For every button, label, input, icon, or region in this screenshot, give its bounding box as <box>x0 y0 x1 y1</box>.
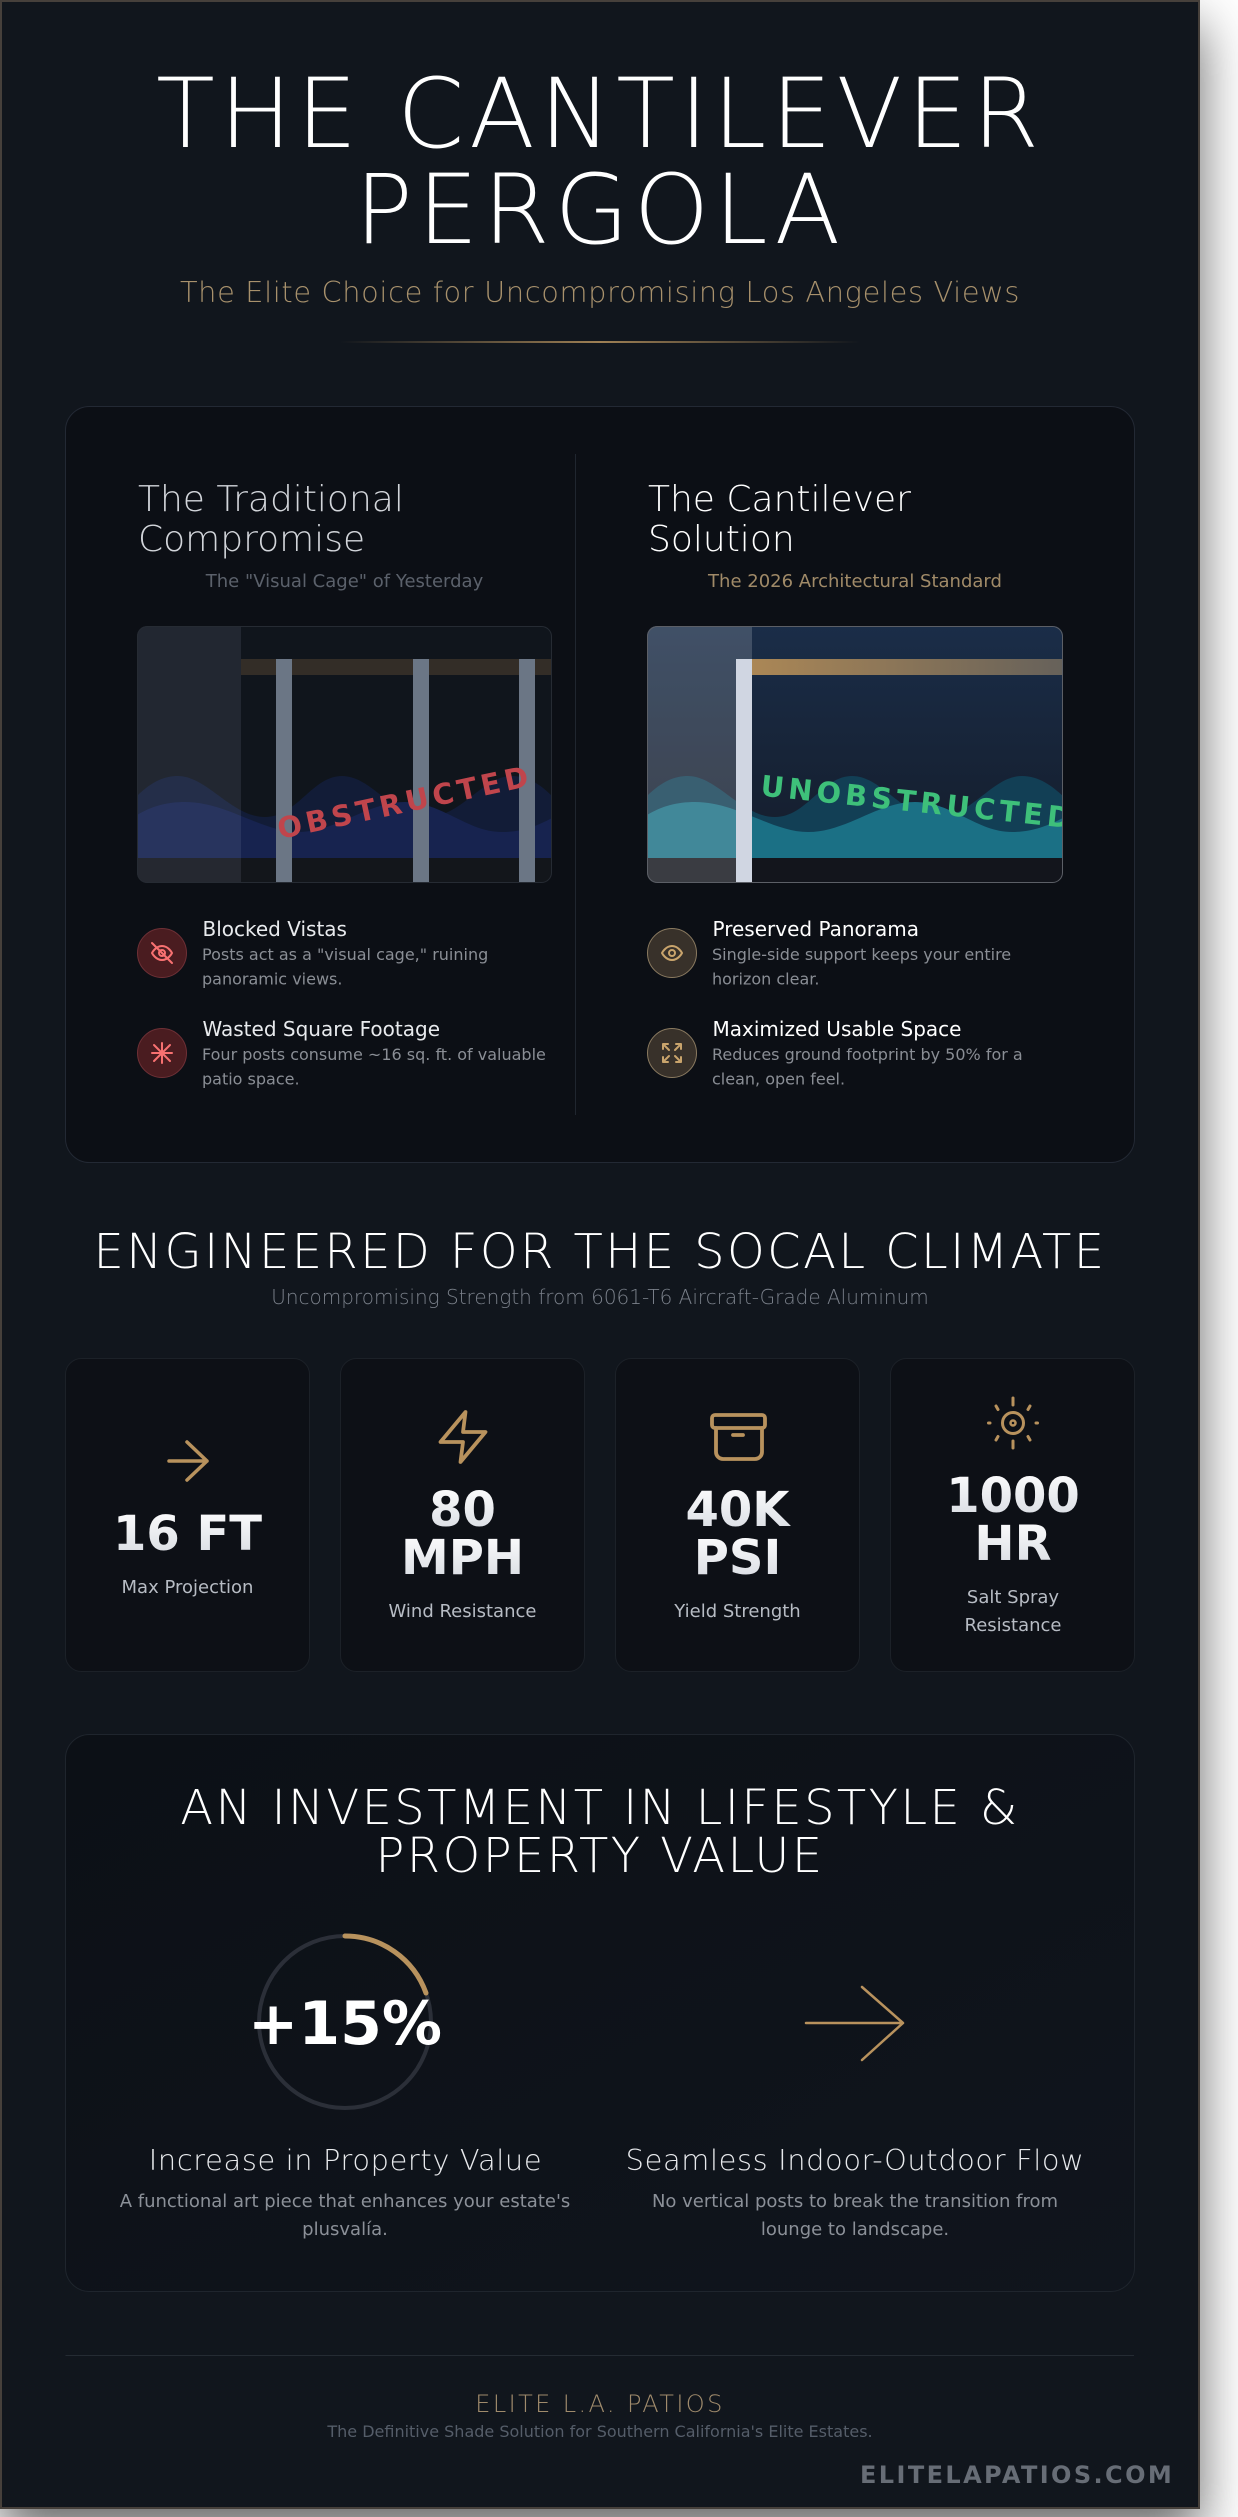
icon: lightning <box>440 1412 486 1462</box>
text: seamless flow: No vertical posts to break the transition from <box>652 2191 1058 2212</box>
title <box>156 58 1044 266</box>
text: seamless flow: Seamless Indoor-Outdoor Flow <box>626 2143 1084 2177</box>
footer tagline: The Definitive Shade Solution for Southern California's Elite Estates. <box>326 2422 873 2441</box>
text: increase in property value: A functional art piece that enhances your estate's <box>120 2191 570 2212</box>
icon: sun <box>988 1398 1038 1448</box>
stat card: yield strength: Yield Strength <box>673 1601 801 1622</box>
section heading: engineered: ENGINEERED FOR THE SOCAL CLIMATE <box>93 1224 1107 1280</box>
illustration: single-side cantilever, unobstructed <box>647 626 1077 883</box>
stat card: max projection <box>66 1358 310 1672</box>
subheading: traditional: The "Visual Cage" of Yesterday <box>205 571 484 592</box>
chart: +15% property value ring <box>248 1936 442 2108</box>
icon: eye <box>648 928 696 978</box>
stat card: max projection: 16 FT <box>113 1506 262 1562</box>
stat card: yield strength <box>616 1358 860 1672</box>
text: seamless flow: lounge to landscape. <box>761 2219 949 2240</box>
heading: investment: AN INVESTMENT IN LIFESTYLE & <box>180 1780 1020 1836</box>
feature: wasted square footage: Four posts consume ~16 sq. ft. of valuable <box>202 1045 546 1064</box>
feature: maximized usable space: Reduces ground footprint by 50% for a <box>712 1045 1023 1064</box>
heading: traditional: Compromise <box>138 519 365 560</box>
stat card: salt spray resistance: 1000 <box>946 1468 1080 1524</box>
feature: preserved panorama: Preserved Panorama <box>712 917 919 941</box>
feature: wasted square footage: patio space. <box>202 1070 300 1088</box>
heading: traditional <box>138 479 404 560</box>
feature: blocked vistas: Blocked Vistas <box>202 917 347 941</box>
heading: investment: PROPERTY VALUE <box>375 1828 825 1884</box>
stat card: wind resistance: Wind Resistance <box>389 1601 536 1622</box>
feature: blocked vistas: Posts act as a "visual cage," ruining <box>202 945 488 964</box>
feature: wasted square footage: Wasted Square Footage <box>202 1017 440 1041</box>
panel: comparison <box>66 406 1134 1162</box>
label: obstructed: OBSTRUCTED <box>274 759 536 846</box>
icon: expand arrows <box>648 1028 696 1078</box>
subtitle: The Elite Choice for Uncompromising Los Angeles Views <box>180 275 1020 309</box>
stat card: wind resistance <box>340 1358 584 1672</box>
feature: preserved panorama: horizon clear. <box>712 970 819 988</box>
heading: investment <box>180 1780 1020 1884</box>
icon: arrow <box>169 1442 207 1480</box>
stat card: salt spray resistance: Resistance <box>964 1615 1062 1636</box>
feature: wasted square footage <box>138 1017 546 1088</box>
feature: blocked vistas: panoramic views. <box>202 970 342 988</box>
feature: preserved panorama: Single-side support keeps your entire <box>712 945 1011 964</box>
chart: +15% property value ring: +15% <box>248 1989 442 2059</box>
icon: box <box>712 1415 765 1459</box>
feature: maximized usable space <box>648 1017 1023 1088</box>
icon: crossed eye <box>138 928 186 978</box>
stat card: salt spray resistance <box>890 1358 1134 1672</box>
illustration: four-post pergola, obstructed <box>137 626 552 883</box>
title: PERGOLA <box>355 154 845 266</box>
section subheading: Uncompromising Strength from 6061-T6 Aircraft-Grade Aluminum <box>271 1285 929 1309</box>
panel: investment <box>66 1734 1134 2292</box>
header <box>156 58 1044 343</box>
text: increase in property value: Increase in Property Value <box>149 2143 542 2177</box>
stat card: salt spray resistance: Salt Spray <box>967 1587 1059 1608</box>
watermark: ELITELAPATIOS.COM <box>860 2461 1174 2489</box>
heading: traditional: The Traditional <box>138 479 404 520</box>
stat card: yield strength: PSI <box>694 1530 781 1586</box>
heading: cantilever: The Cantilever <box>648 479 911 520</box>
icon: flow arrow <box>806 1987 903 2060</box>
stat card: wind resistance: MPH <box>401 1530 524 1586</box>
feature: maximized usable space: clean, open feel. <box>712 1070 845 1088</box>
stat card: max projection: Max Projection <box>122 1577 253 1598</box>
text: increase in property value <box>120 2143 570 2240</box>
text: seamless flow <box>626 2143 1084 2240</box>
feature: blocked vistas <box>138 917 488 988</box>
feature: maximized usable space: Maximized Usable Space <box>712 1017 961 1041</box>
feature: preserved panorama <box>648 917 1011 988</box>
icon: asterisk <box>138 1028 186 1078</box>
stat card: salt spray resistance: HR <box>974 1516 1052 1572</box>
label: unobstructed: UNOBSTRUCTED <box>759 769 1077 835</box>
stat card: yield strength: 40K <box>686 1482 791 1538</box>
footer brand: ELITE L.A. PATIOS <box>475 2390 725 2418</box>
heading: cantilever <box>648 479 911 560</box>
title: THE CANTILEVER <box>156 58 1044 170</box>
text: increase in property value: plusvalía. <box>302 2219 388 2240</box>
subheading: cantilever: The 2026 Architectural Standard <box>707 571 1002 592</box>
stat card: wind resistance: 80 <box>429 1482 496 1538</box>
heading: cantilever: Solution <box>648 519 795 560</box>
